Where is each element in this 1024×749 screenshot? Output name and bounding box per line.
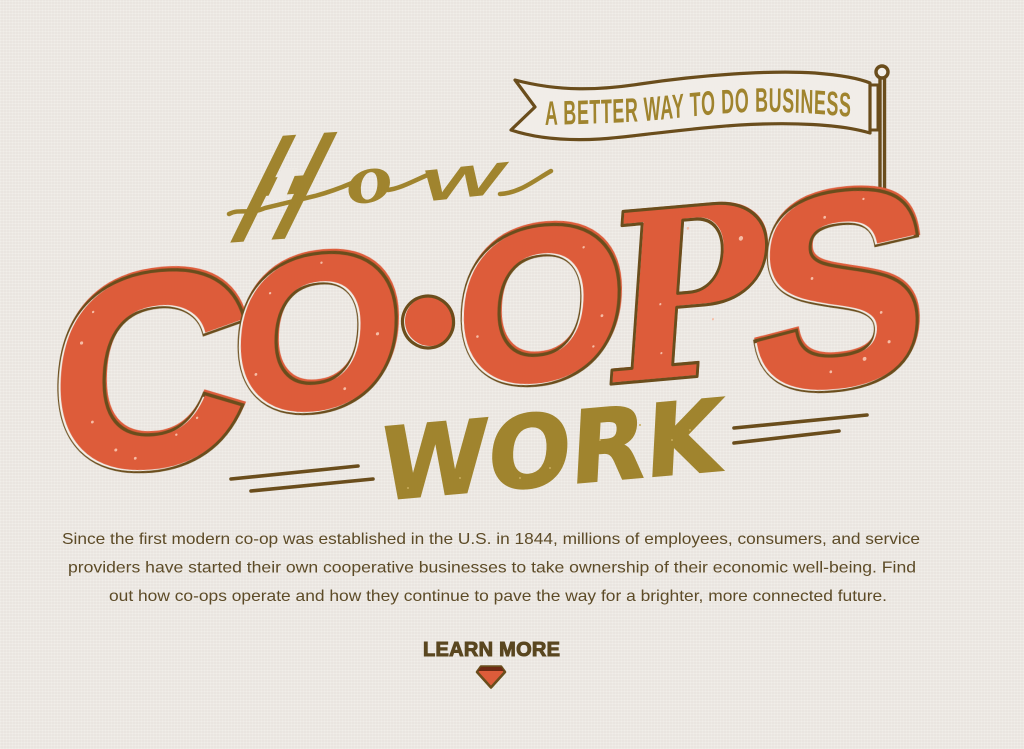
letter S: S — [745, 129, 935, 453]
speckles — [407, 424, 691, 489]
banner ribbon — [511, 72, 870, 140]
intro paragraph: Since the first modern co-op was established in the U.S. in 1844, millions of employees, consumers, and service — [62, 531, 920, 548]
letter P: P — [597, 149, 779, 441]
crossbar knockout — [267, 168, 298, 199]
main title: CO-OPS — [42, 129, 935, 534]
letter O: O — [227, 204, 409, 463]
intro paragraph — [62, 531, 920, 605]
icon: down arrow — [477, 666, 505, 688]
letter C: C — [42, 208, 257, 534]
letter C: C — [42, 208, 257, 534]
banner tab — [870, 85, 878, 130]
word: WORK: WORK — [378, 378, 728, 524]
letter O: O — [227, 204, 409, 463]
center dot — [398, 292, 458, 352]
flourish — [229, 171, 551, 214]
speed lines left — [231, 466, 373, 491]
learn more label: LEARN MORE — [423, 639, 560, 661]
banner text: A BETTER WAY TO DO BUSINESS — [546, 88, 850, 125]
script word: How — [208, 99, 551, 277]
script word: How: H — [208, 99, 360, 277]
letter P: P — [598, 147, 780, 440]
letter O: O — [450, 176, 632, 435]
flag pole — [876, 66, 888, 194]
speckles — [74, 301, 204, 465]
letter O: O — [450, 176, 632, 435]
intro paragraph: providers have started their own cooperative businesses to take ownership of their economic well-being. Find — [68, 560, 916, 576]
script word: How: o — [340, 137, 398, 220]
script word: How: w — [419, 142, 512, 213]
intro paragraph: out how co-ops operate and how they continue to pave the way for a brighter, more connected future. — [109, 588, 887, 605]
flag banner — [509, 64, 890, 188]
speed lines right — [734, 415, 867, 443]
letter S: S — [745, 129, 935, 453]
